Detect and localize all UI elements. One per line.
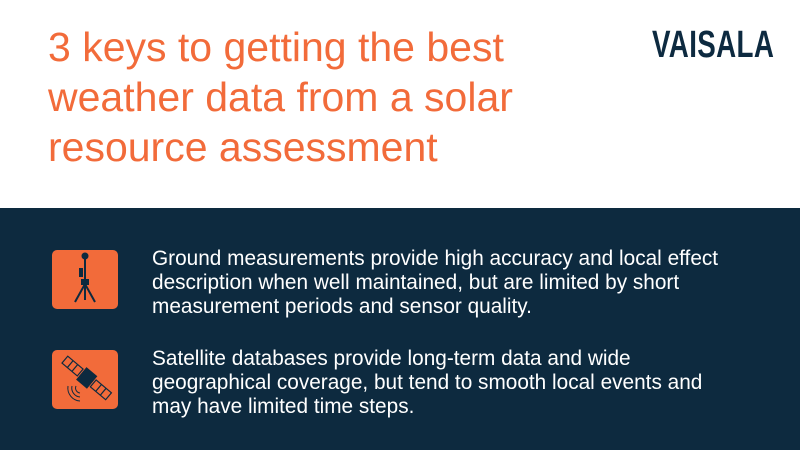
icon: satellite <box>52 350 118 409</box>
title: weather data from a solar <box>48 74 513 120</box>
title: resource assessment <box>48 124 438 170</box>
text: satellite databases <box>152 347 702 418</box>
text: satellite databases: may have limited time steps. <box>152 395 414 418</box>
text: ground measurements: measurement periods and sensor quality. <box>152 295 532 318</box>
text: satellite databases: geographical coverage, but tend to smooth local events and <box>152 371 702 394</box>
panel: content <box>0 208 800 450</box>
text: ground measurements: description when well maintained, but are limited by short <box>152 271 679 294</box>
title: 3 keys to getting the best <box>48 24 504 70</box>
title <box>48 24 513 170</box>
text: ground measurements: Ground measurements provide high accuracy and local effect <box>152 247 718 270</box>
text: satellite databases: Satellite databases provide long-term data and wide <box>152 347 631 370</box>
logo: VAISALA <box>652 24 774 66</box>
text: ground measurements <box>152 247 718 318</box>
icon: weather station tripod <box>52 250 118 309</box>
